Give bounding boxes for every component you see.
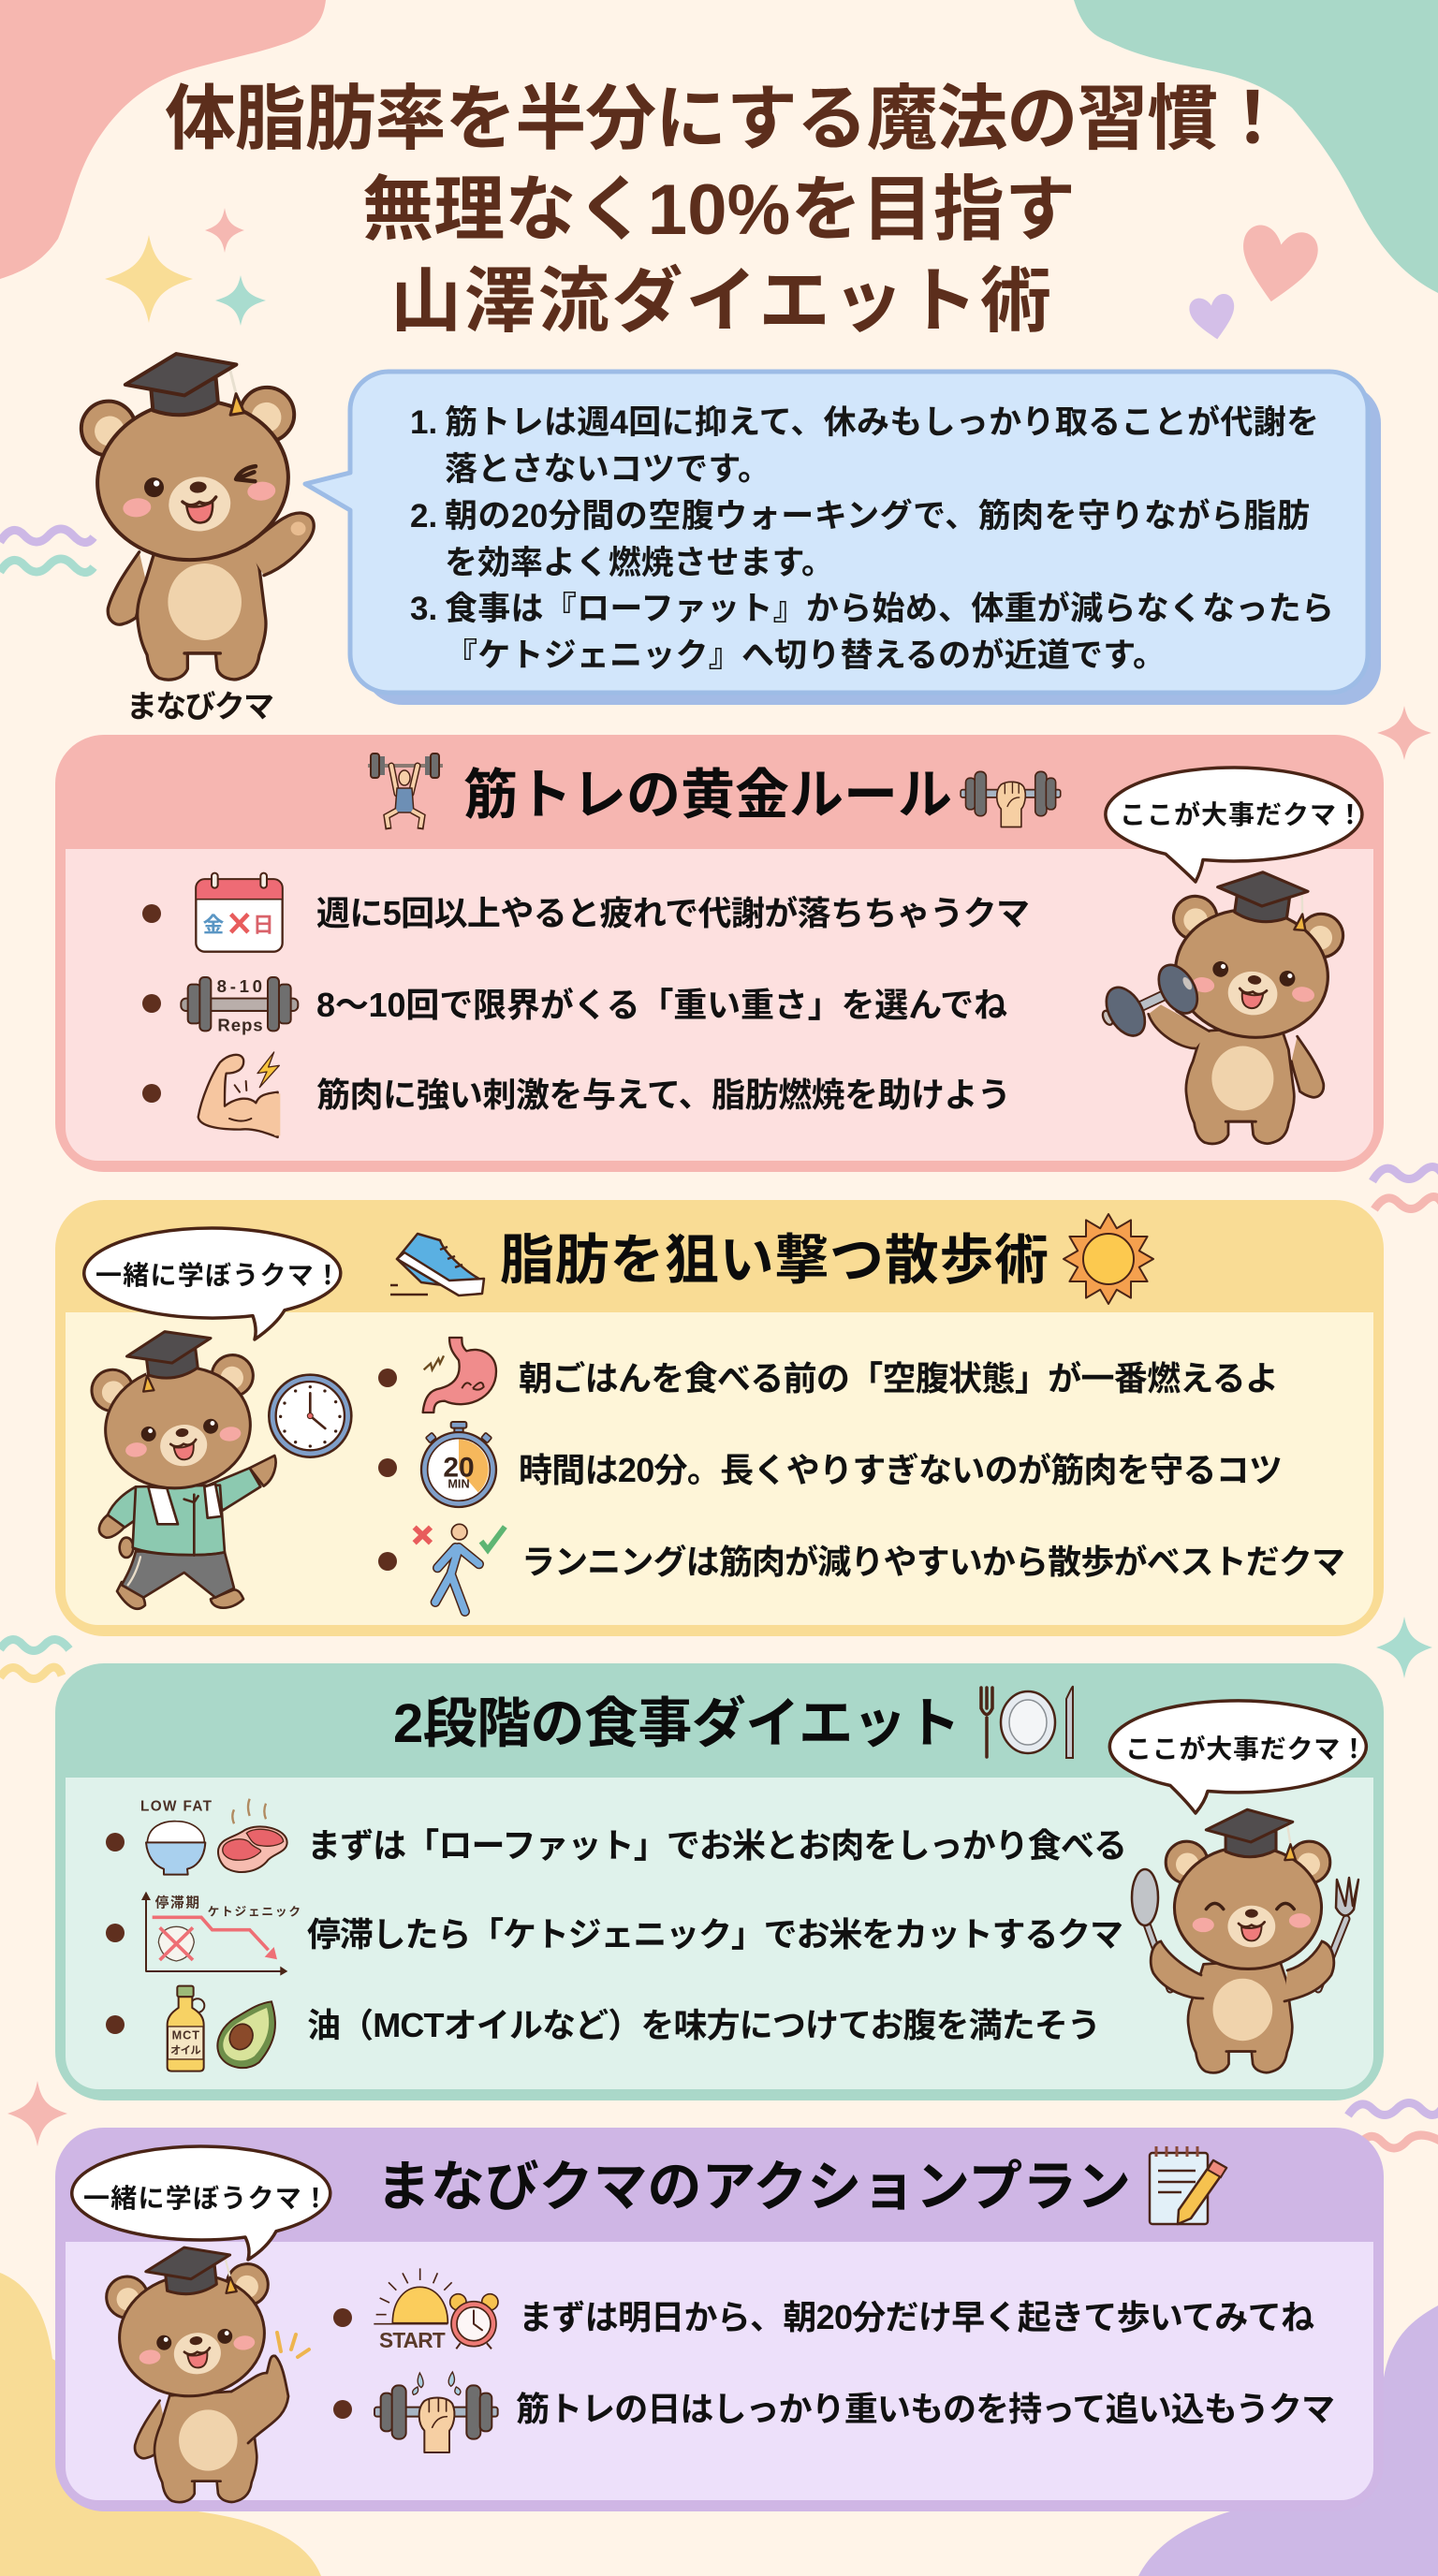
row: MCT oil xyxy=(106,1986,1101,2071)
speech bubble: let's learn xyxy=(72,2146,330,2260)
icon: MCT oil and avocado xyxy=(168,1986,275,2071)
row: weekly limit: 週に5回以上やると疲れで代謝が落ちちゃうクマ xyxy=(316,894,1030,932)
row: weekly limit xyxy=(142,873,1030,952)
panel: two-stage diet xyxy=(55,1663,1384,2100)
icon: walker with cross and check xyxy=(415,1524,505,1612)
icon: sneaker xyxy=(390,1234,484,1295)
panel: summary speech bubble: 『ケトジェニック』へ切り替えるのが近道です。 xyxy=(445,637,1166,674)
speech bubble: important xyxy=(1109,1701,1367,1813)
icon: MCT oil and avocado: MCT xyxy=(172,2028,199,2042)
icon: 8-10 reps dumbbell: 8-10 xyxy=(217,976,262,996)
row: walking is best: ランニングは筋肉が減りやすいから散歩がベストだクマ xyxy=(521,1543,1345,1581)
sparkles and hearts decoration xyxy=(0,208,1438,2148)
panel: fat-burning walking xyxy=(55,1200,1384,1636)
speech bubble: important: ここが大事だクマ！ xyxy=(1120,799,1363,829)
icon: stopwatch 20 min xyxy=(421,1422,496,1507)
panel: summary speech bubble: 筋トレは週4回に抑えて、休みもしっかり取ることが代謝を xyxy=(445,404,1319,441)
row: twenty minutes: 時間は20分。長くやりすぎないのが筋肉を守るコツ xyxy=(519,1451,1283,1489)
heading: 脂肪を狙い撃つ散歩術 xyxy=(500,1230,1049,1291)
row: heavy lifting: 筋トレの日はしっかり重いものを持って追い込もうクマ xyxy=(516,2390,1335,2428)
icon: weight plateau chart xyxy=(141,1892,301,1976)
icon: rice bowl and steak: LOW FAT xyxy=(140,1798,213,1814)
panel: summary speech bubble: 落とさないコツです。 xyxy=(445,451,770,488)
icon: stopwatch 20 min: MIN xyxy=(448,1478,470,1491)
row: heavy lifting xyxy=(333,2372,1335,2452)
icon: plate with cutlery xyxy=(981,1687,1073,1758)
icon: calendar xyxy=(196,873,283,952)
icon: fist dumbbell with sweat xyxy=(374,2372,498,2452)
row: ketogenic switch xyxy=(106,1892,1123,1976)
icon: calendar: 金 xyxy=(203,913,225,937)
icon: MCT oil and avocado: オイル xyxy=(170,2044,201,2056)
row: muscle stimulus: 筋肉に強い刺激を与えて、脂肪燃焼を助けよう xyxy=(316,1076,1011,1114)
bear with dumbbell xyxy=(1098,861,1350,1144)
icon: calendar: 日 xyxy=(253,913,274,937)
panel: summary speech bubble: 2. xyxy=(410,498,437,534)
icon: weight plateau chart: ケトジェニック xyxy=(208,1906,301,1919)
panel: summary speech bubble: 朝の20分間の空腹ウォーキングで、筋肉を守りながら脂肪 xyxy=(445,498,1310,534)
row: muscle stimulus xyxy=(142,1052,1011,1137)
title: 無理なく10%を目指す xyxy=(362,170,1076,250)
icon: rice bowl and steak xyxy=(140,1798,287,1875)
row: walking is best xyxy=(378,1524,1345,1612)
speech bubble: important xyxy=(1106,768,1363,882)
icon: weightlifter xyxy=(368,754,443,829)
heading: 筋トレの黄金ルール xyxy=(463,765,952,826)
row: twenty minutes xyxy=(378,1422,1283,1507)
row: start tomorrow xyxy=(333,2268,1314,2352)
row: fasting state xyxy=(378,1338,1279,1412)
row: fasting state: 朝ごはんを食べる前の「空腹状態」が一番燃えるよ xyxy=(519,1359,1279,1398)
panel: summary speech bubble: 1. xyxy=(410,404,437,441)
walking bear with clock xyxy=(85,1322,351,1609)
icon: fist with dumbbell xyxy=(961,771,1061,827)
icon: 8-10 reps dumbbell: Reps xyxy=(217,1015,263,1034)
heading: 2段階の食事ダイエット xyxy=(393,1693,961,1754)
icon: stomach xyxy=(423,1338,496,1412)
icon: wall clock xyxy=(269,1375,351,1457)
icon: sunrise and alarm clock xyxy=(374,2268,498,2352)
title xyxy=(165,80,1288,342)
panel: summary speech bubble: を効率よく燃焼させます。 xyxy=(445,545,834,581)
speech bubble: important: ここが大事だクマ！ xyxy=(1125,1734,1367,1764)
row: low fat xyxy=(106,1798,1127,1875)
panel: summary speech bubble: 3. xyxy=(410,591,437,627)
speech bubble: let's learn xyxy=(84,1228,341,1339)
heading: まなびクマのアクションプラン xyxy=(376,2157,1131,2217)
mascot: waving graduate bear xyxy=(76,344,314,680)
icon: notepad and pencil xyxy=(1150,2146,1226,2224)
icon: weight plateau chart: 停滞期 xyxy=(155,1894,199,1910)
panel: summary speech bubble: 食事は『ローファット』から始め、体重が減らなくなったら xyxy=(445,591,1334,627)
icon: sun xyxy=(1064,1214,1153,1304)
speech bubble: let's learn: 一緒に学ぼうクマ！ xyxy=(83,2184,329,2213)
bear with spoon and fork xyxy=(1132,1809,1358,2072)
title: 山澤流ダイエット術 xyxy=(390,262,1051,342)
row: reps: 8〜10回で限界がくる「重い重さ」を選んでね xyxy=(316,986,1007,1024)
thumbs-up bear xyxy=(102,2239,309,2502)
row: low fat: まずは「ローファット」でお米とお肉をしっかり食べる xyxy=(307,1826,1127,1865)
icon: sunrise and alarm clock: START xyxy=(379,2328,446,2352)
row: ketogenic switch: 停滞したら「ケトジェニック」でお米をカットするクマ xyxy=(307,1915,1123,1954)
icon: stopwatch 20 min: 20 xyxy=(443,1452,475,1483)
panel: summary speech bubble xyxy=(305,372,1381,705)
title: 体脂肪率を半分にする魔法の習慣！ xyxy=(165,80,1288,159)
mascot name label: まなびクマ xyxy=(126,689,274,724)
row: start tomorrow: まずは明日から、朝20分だけ早く起きて歩いてみてね xyxy=(519,2298,1314,2336)
icon: flexed arm xyxy=(198,1052,280,1137)
row: MCT oil: 油（MCTオイルなど）を味方につけてお腹を満たそう xyxy=(307,2006,1101,2044)
row: reps xyxy=(142,976,1007,1034)
speech bubble: let's learn: 一緒に学ぼうクマ！ xyxy=(95,1261,341,1290)
panel: action plan xyxy=(55,2128,1384,2511)
icon: 8-10 reps dumbbell xyxy=(181,976,298,1034)
panel: strength training rules xyxy=(55,735,1384,1172)
